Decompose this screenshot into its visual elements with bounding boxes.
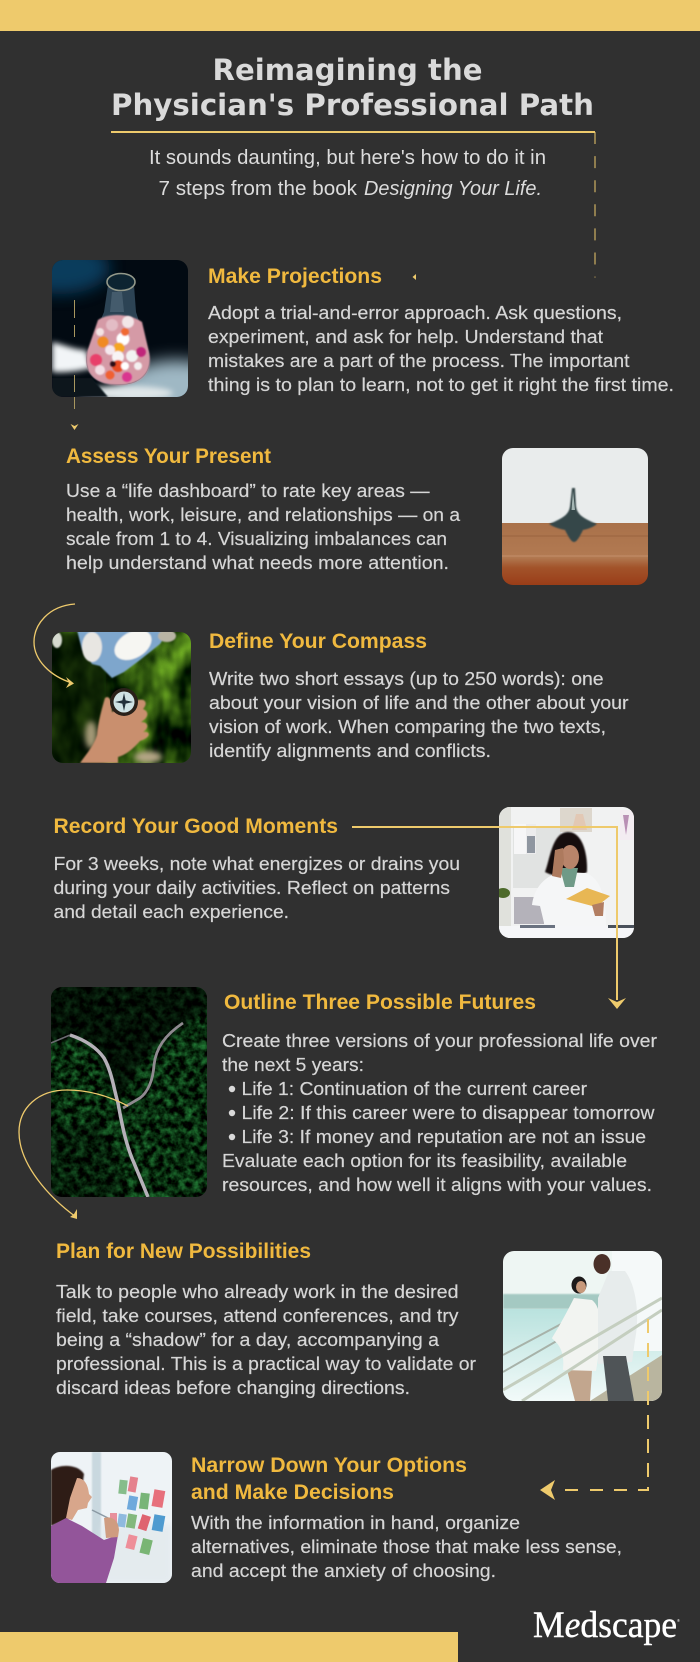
text block: identify alignments and conflicts.	[209, 740, 491, 761]
arrow: faint dashed from step 1 to step 2	[70, 300, 78, 430]
text block: scale from 1 to 4. Visualizing imbalances can	[66, 528, 447, 549]
arrow: solid from step 4 to step 5	[352, 827, 626, 1009]
panel: outline three possible futures	[45, 980, 657, 1197]
panel: plan for new possibilities	[56, 1240, 662, 1401]
heading: Outline Three Possible Futures	[224, 991, 536, 1014]
text block	[66, 480, 461, 573]
text block: Life 3: If money and reputation are not an issue	[242, 1126, 646, 1147]
photo: compass in forest	[52, 632, 191, 763]
heading: and Make Decisions	[191, 1481, 394, 1504]
photo: two doctors on stairs	[503, 1251, 662, 1401]
text block: Create three versions of your professional life over	[222, 1030, 657, 1051]
text block: Life 2: If this career were to disappear tomorrow	[242, 1102, 655, 1123]
text block: about your vision of life and the other about your	[209, 692, 629, 713]
text block: For 3 weeks, note what energizes or drains you	[54, 853, 460, 874]
subtitle: 7 steps from the book	[158, 178, 358, 200]
panel: narrow down your options	[51, 1452, 622, 1583]
arrow: small head toward step 1	[412, 274, 416, 280]
text block	[222, 1030, 657, 1195]
bottom yellow band	[0, 1632, 458, 1662]
text block: professional. This is a practical way to validate or	[56, 1353, 476, 1374]
title	[111, 53, 594, 122]
text block	[208, 302, 674, 395]
text block: vision of work. When comparing the two texts,	[209, 716, 606, 737]
heading: Make Projections	[208, 265, 382, 288]
title underline and dashed connector	[111, 132, 595, 278]
photo: woman at sticky notes	[51, 1452, 172, 1583]
text block: Adopt a trial-and-error approach. Ask questions,	[208, 302, 622, 323]
photo: spinning top	[502, 448, 648, 585]
text block	[54, 853, 460, 922]
text block: Life 1: Continuation of the current career	[242, 1078, 587, 1099]
text block: and accept the anxiety of choosing.	[191, 1560, 496, 1581]
heading: Narrow Down Your Options	[191, 1454, 467, 1477]
panel: record your good moments	[54, 807, 634, 938]
text block: Write two short essays (up to 250 words): one	[209, 668, 604, 689]
subtitle: It sounds daunting, but here's how to do it in	[149, 147, 546, 169]
title: Reimagining the	[212, 53, 482, 87]
heading: Assess Your Present	[66, 445, 271, 468]
text block	[191, 1512, 622, 1581]
text block	[209, 668, 629, 761]
text block: during your daily activities. Reflect on patterns	[54, 877, 450, 898]
heading: Plan for New Possibilities	[56, 1240, 311, 1263]
text block: mistakes are a part of the process. The important	[208, 350, 630, 371]
subtitle: Designing Your Life.	[364, 178, 542, 200]
logo: Medscape: Medscape	[533, 1605, 677, 1646]
text block: field, take courses, attend conferences, and try	[56, 1305, 459, 1326]
text block: discard ideas before changing directions.	[56, 1377, 410, 1398]
text block: alternatives, eliminate those that make less sense,	[191, 1536, 622, 1557]
photo: flask	[52, 260, 188, 397]
text block: the next 5 years:	[222, 1054, 364, 1075]
panel: define your compass	[44, 624, 629, 767]
heading: Record Your Good Moments	[54, 815, 338, 838]
arrow: dashed from step 6 to step 7	[540, 1319, 649, 1500]
heading	[191, 1454, 467, 1504]
panel: make projections	[52, 260, 672, 397]
text block: health, work, leisure, and relationships — on a	[66, 504, 461, 525]
text block: and detail each experience.	[54, 901, 289, 922]
top yellow band	[0, 0, 700, 31]
panel: assess your present	[66, 445, 648, 585]
text block: resources, and how well it aligns with your values.	[222, 1174, 652, 1195]
arrow: curved from step 5 to step 6	[19, 1090, 128, 1219]
photo: physician reading a file	[496, 807, 634, 938]
text block: Talk to people who already work in the desired	[56, 1281, 458, 1302]
text block: With the information in hand, organize	[191, 1512, 520, 1533]
text block: Use a “life dashboard” to rate key areas —	[66, 480, 430, 501]
text block: Evaluate each option for its feasibility, available	[222, 1150, 627, 1171]
logo: Medscape: ®	[677, 1618, 680, 1623]
title: Physician's Professional Path	[111, 88, 594, 122]
text block: help understand what needs more attention.	[66, 552, 449, 573]
subtitle	[149, 147, 546, 200]
text block: experiment, and ask for help. Understand that	[208, 326, 603, 347]
heading: Define Your Compass	[209, 630, 427, 653]
arrow: curved from step 2 to step 3	[34, 604, 75, 688]
text block: thing is to plan to learn, not to get it right the first time.	[208, 374, 674, 395]
photo: forked road in forest	[45, 980, 207, 1197]
text block	[56, 1281, 476, 1398]
text block: being a “shadow” for a day, accompanying a	[56, 1329, 440, 1350]
